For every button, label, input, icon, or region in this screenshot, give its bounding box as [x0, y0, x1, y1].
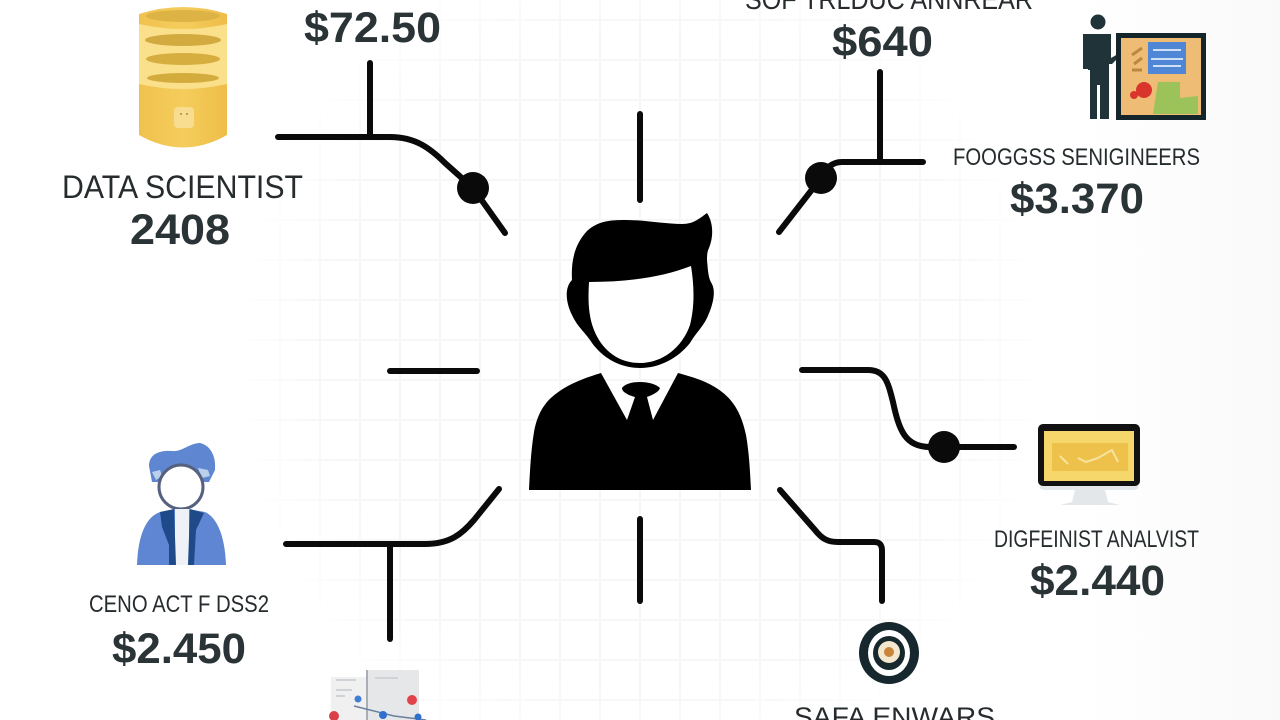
central person icon: [529, 213, 751, 490]
icon: round badge: [859, 622, 919, 684]
connector: bottom centre: [637, 519, 643, 601]
connector: right: [802, 370, 1014, 463]
label: top right role: FOOGGSS SENIGINEERS: [953, 144, 1200, 171]
value: $640: $640: [832, 18, 933, 66]
icon: monitor: [1038, 424, 1140, 505]
label: left role: CENO ACT F DSS2: [89, 591, 269, 618]
connector: left: [390, 368, 477, 374]
connector: top right: [779, 72, 923, 232]
value: 2408: 2408: [130, 206, 230, 254]
icon: gold database: [139, 7, 227, 148]
icon: presenter with board: [1083, 14, 1206, 120]
label: right role: DIGFEINIST ANALVIST: [994, 526, 1199, 553]
value: $2.440: $2.440: [1030, 557, 1165, 605]
connector: bottom right: [780, 490, 882, 601]
connector: top centre: [637, 114, 643, 200]
icon: blue person: [137, 443, 226, 565]
value: $72.50: $72.50: [304, 4, 441, 52]
connector: bottom left: [286, 489, 499, 639]
value: $3.370: $3.370: [1010, 175, 1144, 223]
label: data scientist: DATA SCIENTIST: [62, 169, 303, 205]
icon: scatter chart: [329, 670, 426, 720]
value: $2.450: $2.450: [112, 625, 246, 673]
connector: top left: [278, 63, 505, 233]
